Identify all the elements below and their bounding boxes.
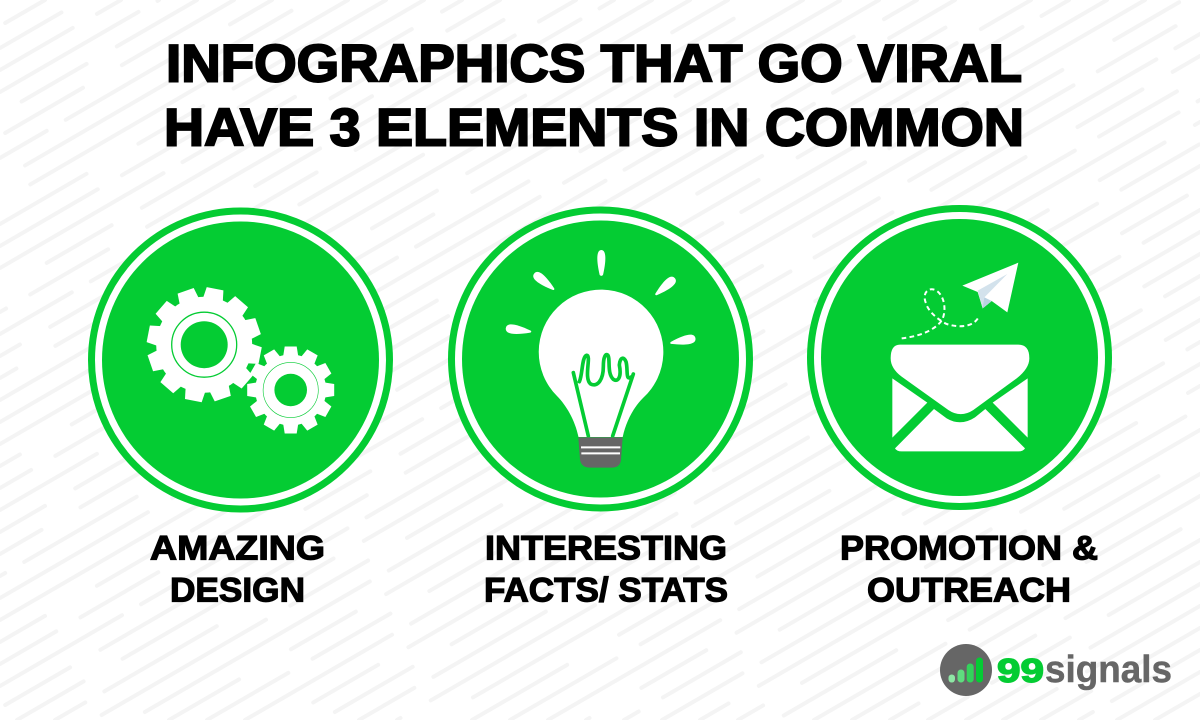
label: promotion and outreach: PROMOTION & [840,529,1098,567]
badge: middle circle [452,210,750,508]
logo: 99signals [940,644,1172,696]
icon: envelope and paper plane [891,263,1029,451]
label: interesting facts: FACTS/ STATS [484,571,728,609]
panel: interesting facts [452,210,750,609]
label: amazing design [150,529,325,609]
icon: large gear [137,278,271,412]
panel: amazing design [92,211,390,609]
label: promotion and outreach [840,529,1098,609]
icon: small gear [247,346,334,434]
logo wordmark: signals [1045,649,1172,691]
badge: left circle [92,211,390,509]
title: HAVE 3 ELEMENTS IN COMMON [164,99,1024,158]
title: INFOGRAPHICS THAT GO VIRAL [166,35,1022,94]
label: promotion and outreach: OUTREACH [867,571,1071,609]
icon: light bulb [505,250,696,468]
badge: right circle [810,208,1108,506]
title [164,35,1024,158]
panel: promotion and outreach [810,208,1108,609]
label: interesting facts [484,529,728,609]
logo mark: signal bars [940,644,992,696]
label: amazing design: DESIGN [170,571,305,609]
label: amazing design: AMAZING [150,529,325,567]
logo wordmark: 99 [997,653,1044,690]
label: interesting facts: INTERESTING [485,529,727,567]
